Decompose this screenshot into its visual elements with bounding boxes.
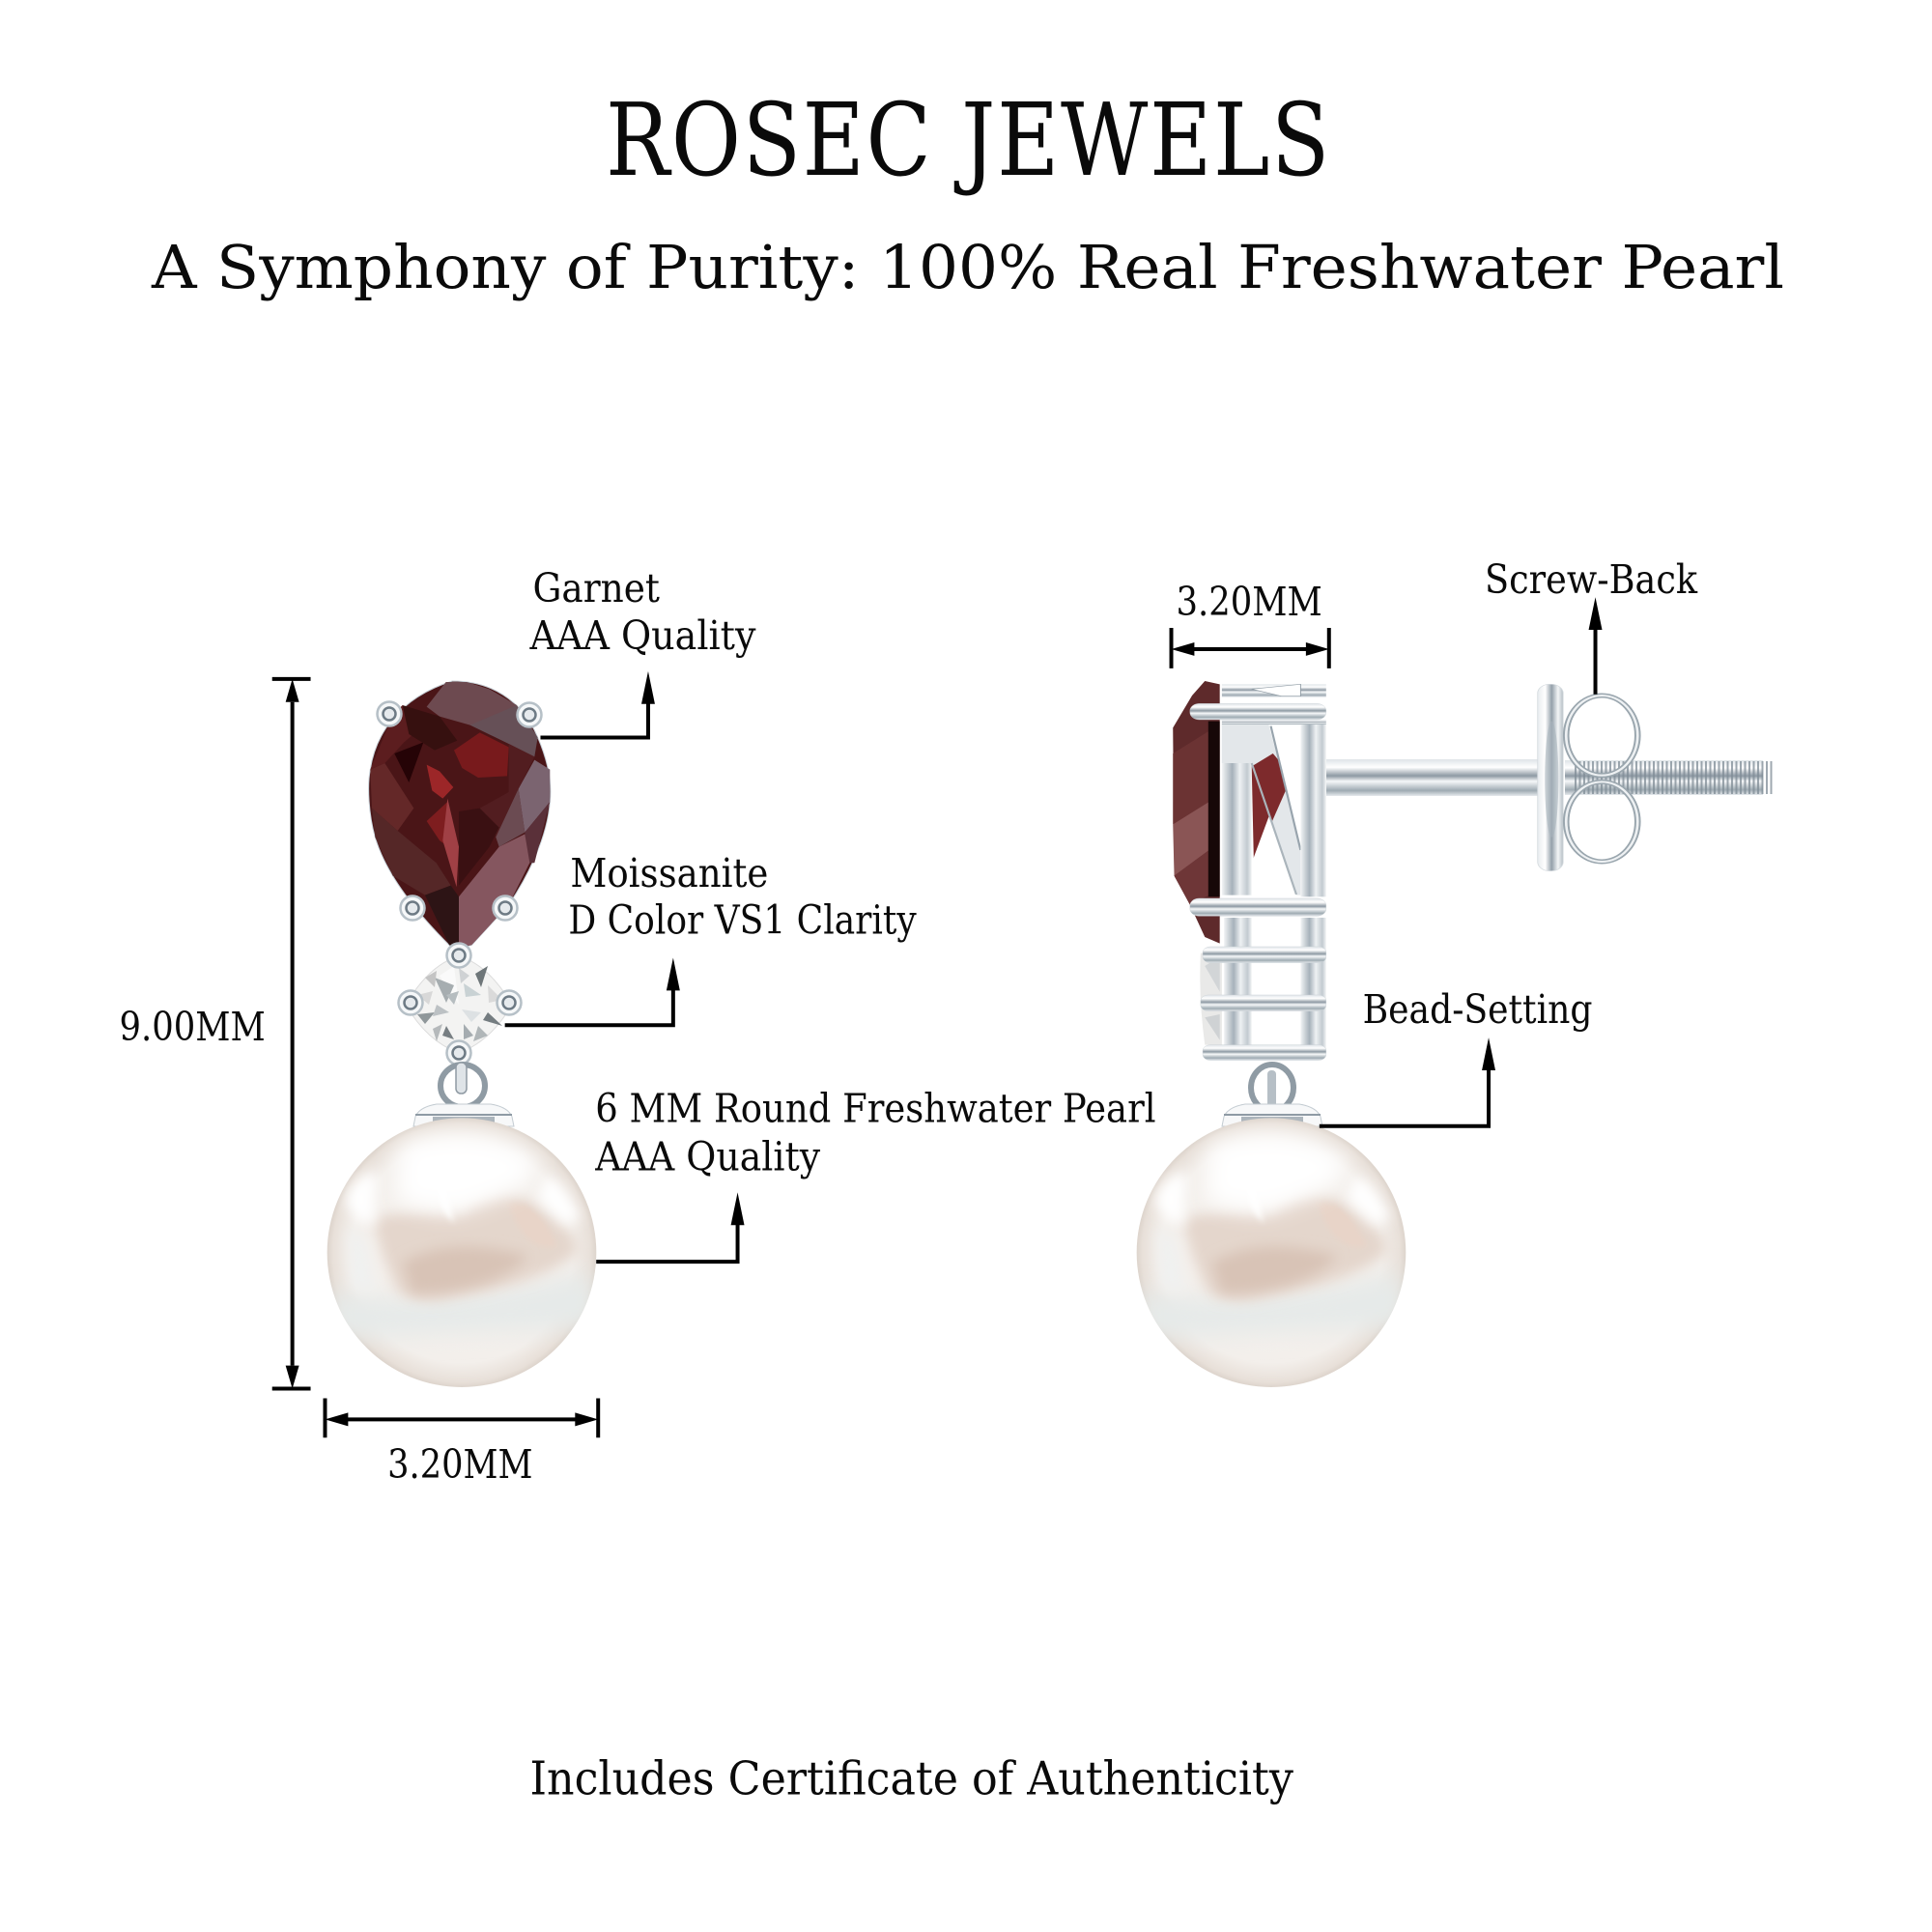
callout: pearl — [594, 1086, 1156, 1262]
callout: pearl: 6 MM Round Freshwater Pearl — [595, 1086, 1156, 1132]
front earring — [327, 681, 599, 1387]
dimension: lower width 3.20MM — [325, 1398, 598, 1488]
icon: moissanite stone — [398, 943, 522, 1065]
footer note: Includes Certificate of Authenticity — [530, 1753, 1293, 1806]
annotations — [119, 556, 1697, 1806]
dimension: lower width 3.20MM: 3.20MM — [387, 1441, 533, 1488]
icon: pearl bail — [413, 1063, 514, 1126]
side earring — [1137, 681, 1773, 1387]
icon: pear garnet gemstone — [369, 681, 551, 949]
callout: screw-back: Screw-Back — [1485, 556, 1697, 603]
dimension: upper width 3.20MM: 3.20MM — [1176, 579, 1322, 625]
callout: bead-setting: Bead-Setting — [1363, 986, 1593, 1033]
dimension: upper width 3.20MM — [1172, 579, 1329, 668]
callout: moissanite: D Color VS1 Clarity — [568, 897, 917, 944]
callout: screw-back — [1485, 556, 1697, 695]
callout: moissanite: Moissanite — [570, 850, 768, 896]
icon: side pearl — [1137, 1118, 1408, 1387]
callout: bead-setting — [1320, 986, 1593, 1126]
subtitle: A Symphony of Purity: 100% Real Freshwater Pearl — [151, 232, 1784, 302]
icon: butterfly back — [1538, 684, 1637, 871]
callout: moissanite — [505, 850, 917, 1025]
icon: garnet side view and basket setting — [1173, 681, 1326, 1061]
icon: freshwater pearl — [327, 1118, 599, 1387]
dimension: height 9.00MM: 9.00MM — [119, 1004, 266, 1050]
icon: garnet prongs — [377, 701, 541, 920]
title: ROSEC JEWELS — [606, 81, 1331, 199]
dimension: height 9.00MM — [119, 679, 311, 1389]
callout: pearl: AAA Quality — [594, 1134, 820, 1180]
callout: garnet — [529, 565, 755, 738]
icon: screw-back post — [1326, 759, 1773, 796]
callout: garnet: AAA Quality — [529, 612, 755, 659]
icon: side bail — [1222, 1065, 1322, 1126]
callout: garnet: Garnet — [533, 565, 660, 611]
